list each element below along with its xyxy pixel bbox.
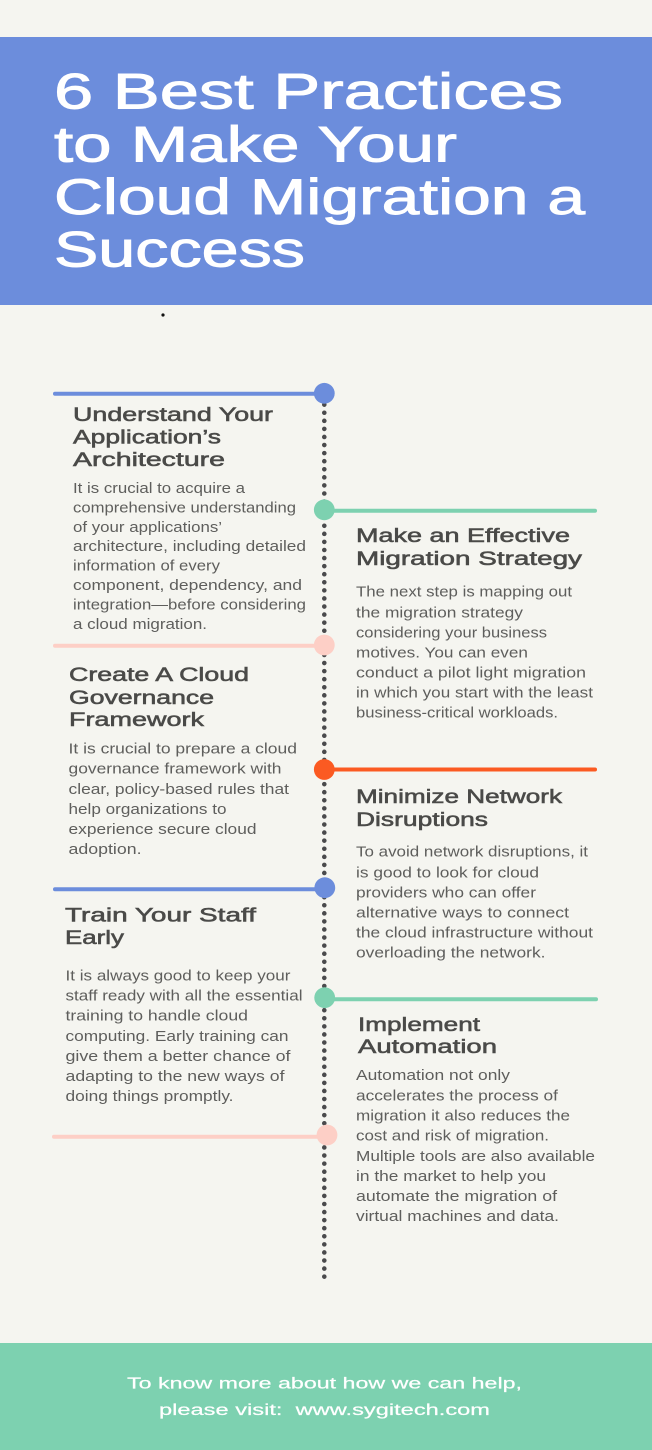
body text bbox=[66, 969, 302, 1105]
connector: step 3 bbox=[53, 635, 335, 655]
body text: Automation not only bbox=[356, 1068, 511, 1084]
panel: minimize network disruptions bbox=[356, 786, 593, 961]
title: Cloud Migration a bbox=[54, 169, 585, 225]
heading: Framework bbox=[69, 709, 204, 731]
body text: alternative ways to connect bbox=[356, 905, 569, 921]
connector: step 6 bbox=[314, 987, 598, 1008]
panel: implement automation bbox=[356, 1014, 595, 1225]
heading: Create A Cloud bbox=[69, 664, 249, 686]
panel: train your staff early bbox=[65, 905, 302, 1105]
heading: Automation bbox=[358, 1036, 497, 1058]
body text: the cloud infrastructure without bbox=[356, 925, 593, 941]
body text: migration it also reduces the bbox=[356, 1108, 570, 1124]
heading bbox=[65, 905, 257, 949]
heading: Governance bbox=[69, 687, 214, 709]
heading: Minimize Network bbox=[356, 786, 562, 808]
body text: conduct a pilot light migration bbox=[356, 665, 586, 681]
body text: virtual machines and data. bbox=[356, 1209, 559, 1225]
body text: business-critical workloads. bbox=[356, 705, 558, 721]
body text: adoption. bbox=[68, 842, 142, 858]
body text: automate the migration of bbox=[356, 1189, 558, 1205]
body text: motives. You can even bbox=[356, 645, 528, 661]
body text: in which you start with the least bbox=[356, 685, 593, 701]
panel: understand your application's architecture bbox=[73, 404, 306, 633]
body text: cost and risk of migration. bbox=[356, 1128, 549, 1144]
body text: It is crucial to acquire a bbox=[73, 481, 246, 497]
body text: The next step is mapping out bbox=[356, 585, 572, 601]
heading: Application’s bbox=[73, 426, 221, 448]
body text: clear, policy-based rules that bbox=[68, 782, 289, 798]
body text: experience secure cloud bbox=[68, 822, 256, 838]
heading: Implement bbox=[358, 1014, 481, 1036]
body text bbox=[73, 481, 306, 633]
footer banner bbox=[0, 1343, 652, 1450]
body text: Multiple tools are also available bbox=[356, 1149, 595, 1165]
footer call to action: please visit: www.sygitech.com bbox=[159, 1402, 490, 1419]
body text: training to handle cloud bbox=[66, 1009, 248, 1025]
body text: component, dependency, and bbox=[73, 578, 302, 594]
body text: staff ready with all the essential bbox=[66, 989, 302, 1005]
body text: in the market to help you bbox=[356, 1169, 546, 1185]
connector: step 1 bbox=[53, 383, 335, 404]
connector: step 5 bbox=[53, 877, 335, 898]
body text: of your applications’ bbox=[73, 520, 222, 536]
heading: Disruptions bbox=[356, 809, 488, 831]
body text: help organizations to bbox=[68, 802, 226, 818]
body text: It is crucial to prepare a cloud bbox=[68, 741, 297, 757]
body text: governance framework with bbox=[68, 761, 282, 777]
body text: integration—before considering bbox=[73, 598, 306, 614]
body text: adapting to the new ways of bbox=[66, 1069, 286, 1085]
panel: create a cloud governance framework bbox=[68, 664, 297, 858]
body text: is good to look for cloud bbox=[356, 865, 539, 881]
heading bbox=[356, 525, 582, 570]
timeline dotted spine bbox=[322, 397, 327, 1278]
body text: To avoid network disruptions, it bbox=[356, 845, 588, 861]
body text: architecture, including detailed bbox=[73, 539, 306, 555]
heading bbox=[73, 404, 274, 471]
heading: Migration Strategy bbox=[356, 548, 582, 570]
panel: make an effective migration strategy bbox=[356, 525, 593, 721]
body text: It is always good to keep your bbox=[66, 969, 291, 985]
heading: Architecture bbox=[73, 449, 225, 471]
heading bbox=[358, 1014, 497, 1058]
body text bbox=[356, 845, 593, 961]
body text: doing things promptly. bbox=[66, 1089, 234, 1105]
body text: a cloud migration. bbox=[73, 617, 207, 633]
body text bbox=[68, 741, 297, 858]
title: to Make Your bbox=[54, 117, 457, 173]
body text: give them a better chance of bbox=[66, 1049, 292, 1065]
heading bbox=[356, 786, 562, 831]
body text: overloading the network. bbox=[356, 945, 546, 961]
title bbox=[54, 63, 585, 278]
heading: Make an Effective bbox=[356, 525, 570, 547]
body text: providers who can offer bbox=[356, 885, 536, 901]
body text: accelerates the process of bbox=[356, 1088, 559, 1104]
connector: step 2 bbox=[314, 499, 597, 520]
body text: computing. Early training can bbox=[66, 1029, 288, 1045]
footer call to action: To know more about how we can help, bbox=[127, 1376, 522, 1393]
body text: comprehensive understanding bbox=[73, 500, 296, 516]
body text bbox=[356, 585, 593, 721]
title: 6 Best Practices bbox=[54, 63, 563, 119]
heading bbox=[69, 664, 249, 731]
header banner bbox=[0, 37, 652, 305]
footer call to action bbox=[127, 1376, 522, 1419]
heading: Early bbox=[65, 927, 124, 949]
heading: Understand Your bbox=[73, 404, 274, 426]
body text: considering your business bbox=[356, 625, 547, 641]
body text: information of every bbox=[73, 558, 221, 574]
body text bbox=[356, 1068, 595, 1225]
connector: closing bbox=[52, 1125, 337, 1145]
heading: Train Your Staff bbox=[65, 905, 257, 927]
title: Success bbox=[54, 222, 305, 278]
connector: step 4 bbox=[314, 759, 597, 780]
body text: the migration strategy bbox=[356, 605, 524, 621]
